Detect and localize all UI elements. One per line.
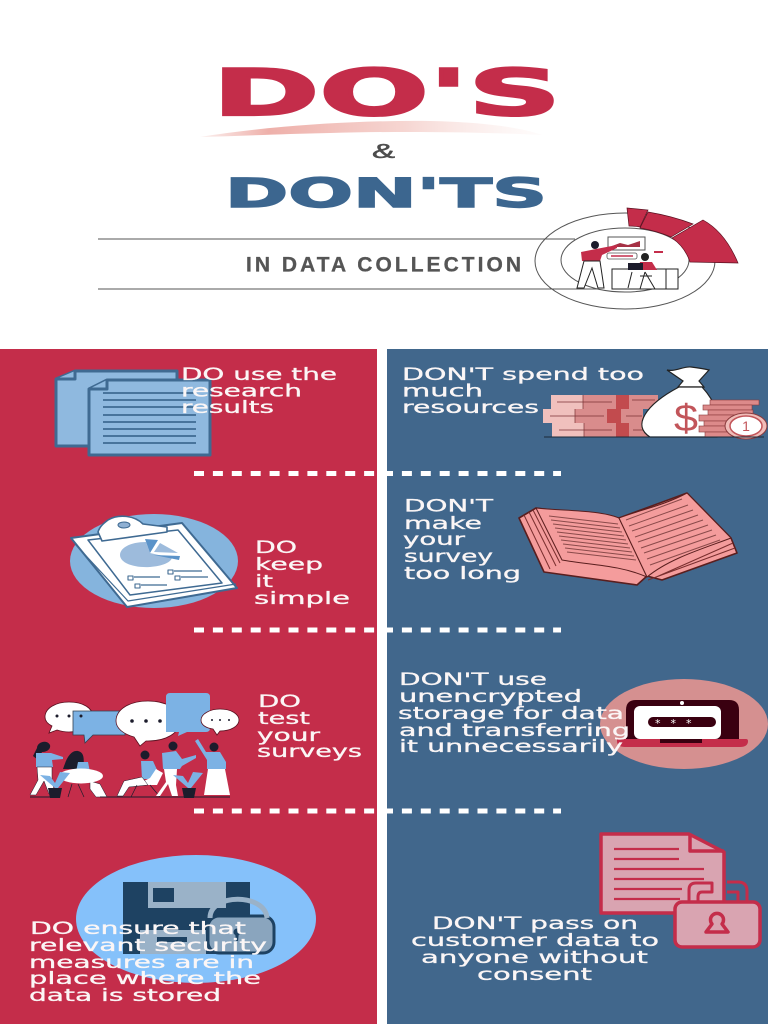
icon: money stacks, bag and coin [543, 367, 767, 440]
brush stroke under title [200, 121, 542, 137]
text: use results: results [181, 398, 274, 418]
figure: plant right [173, 772, 203, 798]
text: spend resources: much [402, 382, 483, 402]
text: unencrypted storage: and transferring [399, 721, 630, 741]
icon: floppy disk with lock [76, 855, 316, 983]
text: test surveys [257, 692, 362, 762]
text: ensure security: DO ensure that [30, 919, 247, 939]
text: pass on customer data [411, 914, 659, 985]
text: keep simple: simple [254, 589, 350, 609]
text: survey too long: DON'T [404, 496, 494, 516]
icon: data analysis team in gauge [535, 208, 738, 309]
figure: seated woman and table [59, 751, 107, 797]
panel: don'ts [387, 349, 768, 1024]
text: spend resources [402, 365, 644, 418]
icon: locked document [601, 834, 760, 947]
text: survey too long [403, 496, 521, 584]
text: pass on customer data: DON'T pass on [432, 914, 638, 934]
text: test surveys: surveys [257, 742, 362, 762]
text: ensure security: place where the [29, 969, 261, 989]
text: unencrypted storage: DON'T use [399, 670, 547, 690]
icon: money stacks, bag and coin: $ [674, 398, 698, 440]
text: ensure security [29, 919, 267, 1006]
text: test surveys: your [257, 726, 320, 746]
subtitle: IN DATA COLLECTION [246, 254, 521, 276]
text: keep simple [254, 538, 350, 609]
text: pass on customer data: customer data to [411, 931, 659, 951]
title: do's: DO'S [212, 57, 561, 131]
text: use results: research [181, 382, 302, 402]
text: pass on customer data: consent [477, 965, 593, 985]
icon: open book [519, 493, 737, 585]
icon: documents [56, 371, 210, 455]
figure: standing person with skirt [195, 739, 230, 795]
figure: standing man high five [156, 742, 196, 796]
text: unencrypted storage: storage for data [398, 704, 624, 724]
text: ensure security: relevant security [29, 936, 267, 956]
text: survey too long: survey [404, 547, 493, 567]
text: keep simple: keep [255, 555, 323, 575]
text: unencrypted storage [398, 670, 630, 757]
dividers across both panels [194, 474, 561, 811]
title: don'ts: DON'TS [225, 171, 547, 217]
figure: plant left [40, 772, 70, 798]
text: survey too long: your [403, 530, 465, 550]
text: use results: DO use the [181, 365, 337, 385]
text: keep simple: it [255, 572, 274, 592]
text: test surveys: test [258, 709, 311, 729]
text: test surveys: DO [258, 692, 301, 712]
text: spend resources: DON'T spend too [402, 365, 644, 385]
text: use results [181, 365, 337, 418]
icon: laptop password [600, 679, 768, 769]
icon: clipboard with pie chart [70, 514, 238, 608]
ampersand: & [372, 141, 396, 163]
panel: do's [0, 349, 377, 1024]
text: unencrypted storage: unencrypted [399, 687, 582, 707]
text: keep simple: DO [255, 538, 297, 558]
text: survey too long: make [404, 514, 482, 534]
text: spend resources: resources [402, 398, 539, 418]
text: ensure security: measures are in [29, 953, 254, 973]
text: ensure security: data is stored [29, 986, 221, 1006]
text: unencrypted storage: it unnecessarily [399, 737, 623, 757]
icon: team discussion [30, 693, 239, 798]
figure: seated man [117, 750, 163, 797]
text: pass on customer data: anyone without [421, 948, 649, 968]
subtitle rule lines [98, 239, 605, 289]
figure: standing woman [30, 742, 63, 795]
text: survey too long: too long [404, 564, 521, 584]
icon: money stacks, bag and coin: 1 [742, 418, 750, 434]
icon: laptop password: ***_ [655, 717, 708, 730]
